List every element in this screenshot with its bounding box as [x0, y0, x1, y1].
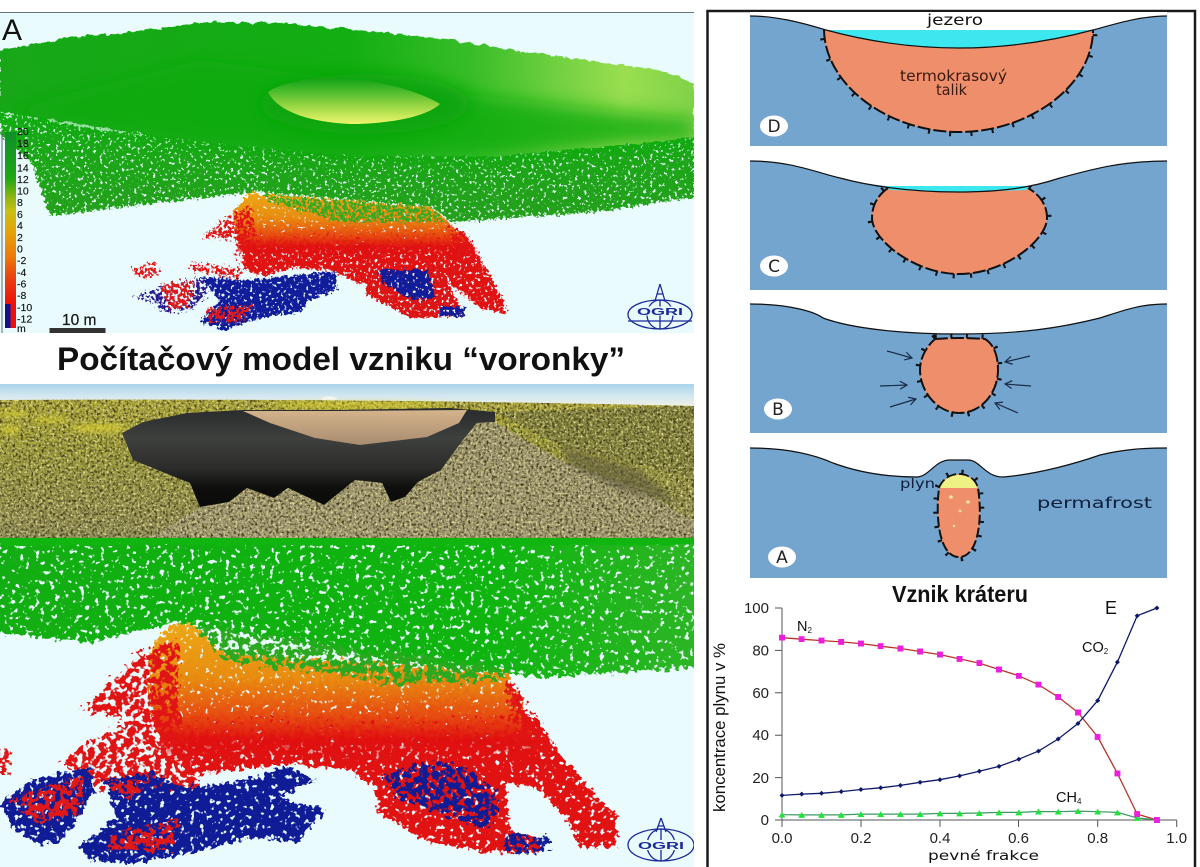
elevation colour legend: m: [17, 323, 26, 335]
label: gas: plyn: [900, 477, 935, 492]
surface line: [750, 304, 1167, 334]
diagram D: large talik beneath a lake: [750, 11, 1167, 146]
badge B: [764, 398, 792, 420]
y axis numbers: 60: [752, 685, 769, 702]
OGRI logo: [628, 284, 692, 329]
sky above surface: [750, 157, 1167, 186]
rubble slope right: [418, 422, 694, 538]
sky above surface: [750, 12, 1167, 30]
sky: [0, 384, 694, 406]
label: CO2: CO: [1082, 640, 1104, 656]
y axis numbers: 0: [761, 812, 769, 829]
surface line: [750, 16, 1167, 48]
left wing of red points: [188, 213, 240, 280]
OGRI logo: OGRI: [637, 307, 683, 318]
label: CH4: CH: [1056, 790, 1077, 806]
OGRI logo: [628, 818, 694, 861]
elevation colour legend: 18: [17, 138, 29, 150]
lake water: [886, 186, 1030, 192]
diagram C: smaller talik with shallow lake: [750, 157, 1167, 290]
series: CH4: [782, 811, 1157, 820]
elevation colour legend: 2: [17, 232, 23, 244]
label: N2: N: [797, 619, 807, 635]
green dots over the crater wall: [262, 194, 446, 222]
label: lake: jezero: [926, 11, 983, 29]
diagram B: rounded talik under pressure: [750, 300, 1167, 433]
talik body: [872, 188, 1047, 274]
badge C: C: [768, 257, 780, 277]
red points along the wall edges: [148, 640, 545, 755]
tundra ground: [0, 400, 694, 538]
small red point patch: [130, 262, 160, 280]
label: thermokarst talik: [900, 67, 1007, 99]
dark rubble patches: [560, 445, 680, 505]
label: CH4: 4: [1077, 797, 1082, 806]
panel letter A: A: [2, 14, 22, 47]
x axis numbers: 0.0: [772, 830, 792, 847]
right red cluster: [366, 268, 465, 318]
red points on blue clusters: [10, 775, 180, 850]
label: N2: 2: [807, 626, 812, 635]
sky above surface: [750, 444, 1167, 477]
foreground ridges: [150, 480, 430, 538]
speckled ground surface: [0, 530, 705, 677]
permafrost ticks: [938, 474, 980, 557]
x axis numbers: 0.4: [930, 830, 950, 847]
dark tundra right: [495, 406, 694, 478]
centre blue cluster: [200, 272, 337, 330]
left blue cluster: [0, 767, 94, 843]
solid upper ground surface: [0, 22, 694, 156]
lower crater wall, red points: [150, 715, 618, 847]
permafrost ticks: [920, 338, 998, 413]
badge A: [768, 546, 796, 568]
centre blue cluster: [79, 767, 324, 863]
x axis title: pevné frakce: [928, 849, 1039, 864]
talik body: [920, 338, 998, 413]
line chart: gas concentration vs solid fraction: [711, 598, 1187, 864]
green dots over crater wall: [193, 625, 508, 684]
surface line: [750, 448, 1167, 477]
right blue cluster: [378, 270, 465, 316]
right blue cluster: [382, 760, 549, 853]
OGRI logo: OGRI: [638, 841, 684, 852]
panel: 3D point-cloud model, close-up: [0, 530, 705, 867]
darker green below the crater: [0, 60, 694, 156]
elevation colour legend: -6: [17, 278, 26, 290]
right red cluster: [373, 755, 540, 853]
elevation colour legend: 10: [17, 186, 29, 198]
surface line: [750, 161, 1167, 192]
diagram A: gas pocket under a mound: [750, 444, 1167, 578]
left wing of red points: [0, 650, 200, 790]
series: N2: [782, 638, 1157, 820]
talik body: [938, 474, 980, 557]
left purple-blue cluster: [132, 278, 207, 313]
scale bar 10 m: [50, 312, 106, 333]
y axis numbers: 80: [752, 642, 769, 660]
title: computer model: Počítačový model vzniku “voronky”: [57, 341, 625, 377]
gas pocket: [940, 475, 977, 488]
label: thermokarst talik: talik: [936, 81, 967, 99]
x axis numbers: 0.8: [1087, 830, 1108, 847]
elevation colour legend: 16: [17, 150, 29, 162]
lower crater wall, red points: [240, 232, 506, 314]
crater floor: [268, 78, 440, 124]
badge C: [760, 256, 788, 277]
talik body: [824, 30, 1093, 132]
elevation colour legend: [2, 126, 32, 335]
lake water: [826, 30, 1093, 48]
elevation colour legend: -2: [17, 255, 26, 267]
x axis numbers: [772, 830, 1187, 847]
elevation colour legend: -12: [17, 314, 32, 326]
elevation colour legend: -4: [17, 267, 26, 279]
label: CO2: 2: [1104, 647, 1109, 656]
solid ground at the top edge: [0, 538, 694, 546]
heading: crater formation: Vznik kráteru: [892, 581, 1028, 607]
upper crater wall gradient: [233, 192, 480, 256]
red points along the wall edges: [233, 205, 480, 256]
pressure arrows: [880, 351, 1031, 413]
yellow tundra patches: [0, 402, 450, 434]
crater dark pit: [122, 408, 495, 508]
elevation colour legend: -8: [17, 290, 26, 302]
x axis numbers: 0.6: [1008, 830, 1029, 847]
x axis numbers: 0.2: [851, 830, 871, 847]
speckled lower ground surface: [0, 112, 694, 222]
y axis numbers: 100: [744, 600, 769, 617]
y axis numbers: 40: [752, 727, 769, 744]
permafrost ticks: [872, 188, 1047, 274]
y axis title: koncentrace plynu v %: [711, 643, 729, 812]
panel: 3D point-cloud model, overview: [0, 12, 694, 335]
y axis numbers: 20: [752, 770, 769, 787]
frame around right column: [708, 11, 1195, 867]
y axis numbers: [744, 600, 769, 829]
badge A: A: [776, 548, 788, 568]
label: thermokarst talik: termokrasový: [900, 67, 1007, 85]
gas bubbles: [949, 495, 970, 527]
axes: [775, 608, 1177, 827]
elevation colour legend: 14: [17, 162, 29, 174]
badge B: B: [772, 400, 784, 420]
series: CO2: [782, 608, 1157, 795]
crater rim shade: [306, 70, 472, 132]
sky above surface: [750, 300, 1167, 334]
elevation colour legend: -10: [17, 302, 32, 314]
elevation colour legend: 20: [17, 126, 29, 138]
panel: crater photograph: [0, 384, 694, 538]
elevation colour legend: 12: [17, 174, 29, 186]
red points on left clusters: [160, 280, 255, 322]
crater tan back wall: [243, 410, 467, 445]
elevation colour legend: 4: [17, 220, 23, 232]
permafrost ticks: [824, 30, 1093, 132]
badge D: [760, 116, 788, 137]
badge D: D: [767, 117, 781, 137]
upper crater wall gradient: [150, 623, 540, 760]
panel letter E: E: [1105, 598, 1117, 618]
label: permafrost: permafrost: [1037, 494, 1152, 512]
elevation colour legend: 6: [17, 209, 23, 221]
elevation colour legend: 0: [17, 244, 23, 256]
x axis numbers: 1.0: [1166, 830, 1187, 847]
helicopter on the horizon: [321, 396, 337, 400]
elevation colour legend: 8: [17, 197, 23, 209]
scale bar 10 m: 10 m: [62, 312, 96, 329]
